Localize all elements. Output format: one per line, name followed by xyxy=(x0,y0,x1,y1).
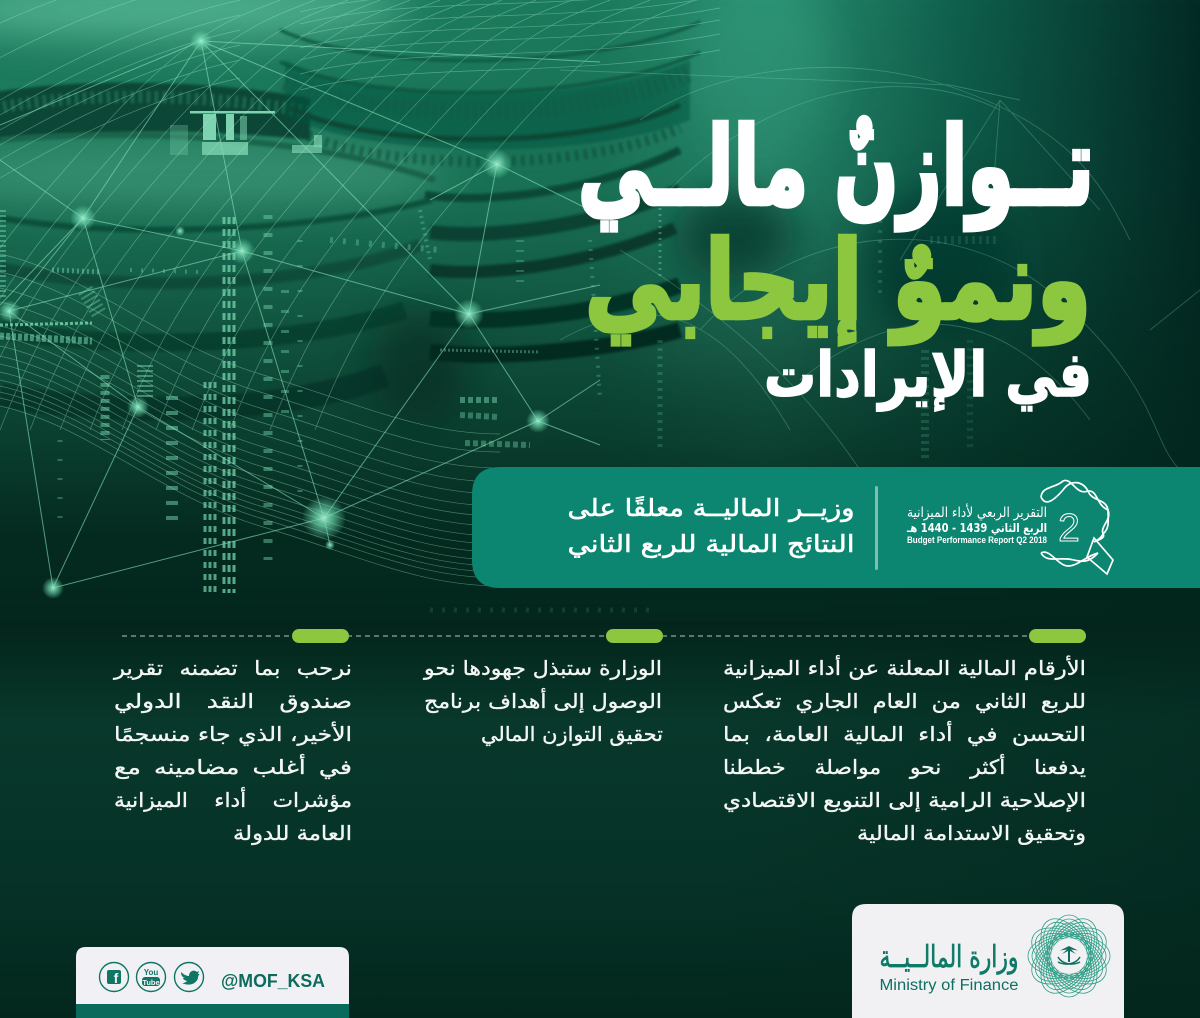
panel: Ministry of Finance logo card xyxy=(852,904,1124,1018)
banner text: النتائج المالية للربع الثاني xyxy=(568,530,854,558)
social handle: @MOF_KSA xyxy=(221,970,325,991)
icon: building skyline xyxy=(170,111,322,155)
ministry Arabic name: وزارة المالــيــة xyxy=(880,940,1018,975)
icon: youtube: Tube xyxy=(142,978,160,987)
text block: column 2 xyxy=(423,656,663,747)
report logo text xyxy=(906,503,1047,545)
banner text xyxy=(568,494,854,558)
icon: ministry emblem xyxy=(1022,909,1116,1003)
text block: column 2: الوصول إلى أهداف برنامج xyxy=(424,688,662,714)
ministry English name: Ministry of Finance xyxy=(880,977,1018,994)
text block: column 1: يدفعنا أكثر نحو مواصلة خططنا xyxy=(723,754,1086,779)
timeline separator xyxy=(122,629,1086,643)
title line 3: في الإيرادات xyxy=(764,338,1092,411)
text block: column 1: للربع الثاني من العام الجاري تعكس xyxy=(723,689,1086,714)
right coin stack xyxy=(280,22,700,355)
text block: column 1: وتحقيق الاستدامة المالية xyxy=(857,821,1086,845)
banner text: وزيــر الماليــة معلقًا على xyxy=(568,494,854,522)
marker pill 2 xyxy=(606,629,663,643)
text block: column 3: في أغلب مضامينه مع xyxy=(114,754,352,780)
report logo text: التقرير الربعي لأداء الميزانية xyxy=(907,503,1047,521)
panel: social media card xyxy=(76,947,349,1018)
icon: youtube: You xyxy=(144,968,158,977)
top-left bright haze xyxy=(0,0,1015,425)
left coin stack xyxy=(0,83,435,409)
report logo text: Budget Performance Report Q2 2018 xyxy=(907,535,1047,545)
text block: column 3: نرحب بما تضمنه تقرير xyxy=(113,656,352,680)
network lines xyxy=(0,41,600,588)
icon: twitter xyxy=(174,962,204,992)
panel: minister comment banner xyxy=(472,467,1200,588)
banner divider xyxy=(875,486,878,570)
text block: column 3: الأخير، الذي جاء منسجمًا xyxy=(114,722,352,747)
title xyxy=(578,105,1094,411)
report logo text: الربع الثاني 1439 - 1440 هـ xyxy=(906,521,1047,535)
icon: youtube xyxy=(136,962,166,992)
data blocks overlay xyxy=(0,180,1000,610)
faint curves on right side xyxy=(560,67,1200,470)
icon: facebook xyxy=(100,962,128,992)
text block: column 3 xyxy=(113,656,352,845)
text block: column 2: الوزارة ستبذل جهودها نحو xyxy=(423,656,662,680)
text block: column 2: تحقيق التوازن المالي xyxy=(481,722,663,747)
text block: column 1 xyxy=(723,655,1086,845)
text block: column 3: صندوق النقد الدولي xyxy=(114,689,352,714)
report logo: twisted ribbon ring xyxy=(1041,480,1113,574)
text block: column 1: الأرقام المالية المعلنة عن أداء الميزانية xyxy=(723,655,1086,680)
text block: column 3: العامة للدولة xyxy=(233,821,352,845)
text block: column 1: التحسن في أداء المالية العامة، بما xyxy=(723,721,1086,747)
title line 2: ونموٌ إيجابي xyxy=(585,219,1091,345)
marker pill 1 xyxy=(1029,629,1086,643)
fine curved grid lines xyxy=(0,0,720,586)
network nodes xyxy=(0,30,550,599)
marker pill 3 xyxy=(292,629,349,643)
report logo: number 2: 2 xyxy=(1058,507,1080,550)
text block: column 3: مؤشرات أداء الميزانية xyxy=(114,787,352,812)
icon: facebook: f xyxy=(114,970,119,986)
text block: column 1: الإصلاحية الرامية إلى التنويع الاقتصادي xyxy=(723,788,1086,813)
